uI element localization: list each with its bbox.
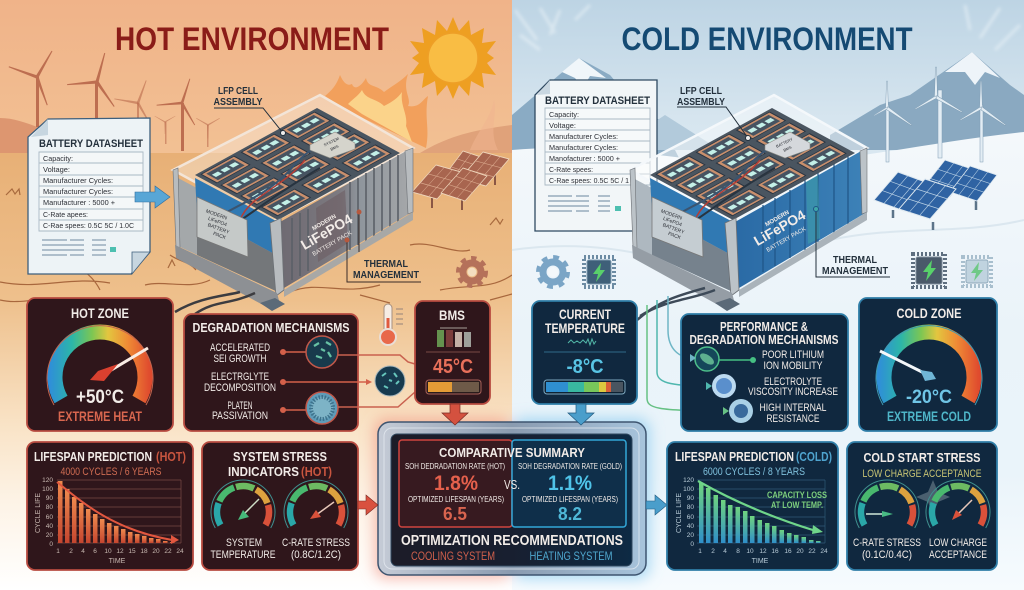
panel: hot lifespan prediction chart: CYCLE LIFE	[35, 493, 42, 533]
panel: hot zone gauge	[27, 298, 173, 431]
document: hot battery datasheet: BATTERY DATASHEET	[39, 138, 143, 150]
panel: cold start stress: ACCEPTANCE	[929, 549, 987, 561]
battery pack: cold: PACK	[667, 231, 682, 241]
battery pack: cold	[630, 95, 867, 311]
panel: hot lifespan prediction chart: 80	[46, 504, 53, 511]
panel: BMS: BMS	[439, 307, 465, 323]
panel: hot lifespan prediction chart: 90	[46, 495, 53, 502]
battery pack: hot: MODERN	[311, 214, 338, 232]
connector: decomposition arrow	[366, 379, 372, 385]
panel: cold lifespan prediction chart: 100	[683, 486, 694, 493]
document: cold battery datasheet: Manufacturer Cycles:	[549, 132, 618, 141]
panel: current temperature	[532, 301, 637, 404]
icon: cold gear	[539, 258, 567, 286]
panel: comparative summary: OPTIMIZED LIFESPAN (YEARS)	[408, 495, 504, 504]
panel: cold lifespan prediction chart: 8	[736, 548, 740, 555]
panel: comparative summary: 8.2	[558, 504, 582, 524]
panel: cold performance and degradation mechanisms: ELECTROLYTE	[764, 376, 822, 388]
panel: cold start stress: LOW CHARGE	[929, 537, 987, 549]
panel: cold start stress: C-RATE STRESS	[853, 537, 921, 549]
panel: cold zone gauge: EXTREME COLD	[887, 408, 971, 424]
panel: cold zone gauge: COLD ZONE	[896, 305, 962, 321]
panel: cold lifespan prediction chart: 60	[687, 514, 694, 521]
panel: hot system stress indicators: (0.8C/1.2C)	[291, 549, 341, 561]
panel: cold lifespan prediction chart: 6000 CYCLES / 8 YEARS	[703, 466, 805, 478]
panel: hot degradation mechanisms: ACCELERATED	[210, 342, 270, 354]
panel: hot lifespan prediction chart: 4000 CYCLES / 6 YEARS	[60, 466, 162, 478]
battery pack: cold: BATTERY	[775, 136, 794, 149]
callout: cold LFP cell assembly	[677, 86, 750, 140]
arrow: BMS to summary	[442, 404, 468, 425]
panel: hot lifespan prediction chart: 40	[46, 523, 53, 530]
glow: comparative summary	[374, 418, 650, 579]
panel: cold performance and degradation mechanisms: ION MOBILITY	[764, 360, 823, 372]
arrow: datasheet to battery	[135, 186, 170, 208]
panel: hot zone gauge: EXTREME HEAT	[58, 408, 142, 424]
panel: hot lifespan prediction chart: 60	[46, 514, 53, 521]
panel: cold start stress	[847, 442, 997, 570]
connector: passivation to BMS	[338, 392, 415, 407]
document: hot battery datasheet: C-Rae spees: 0.5C 5C / 1.0C	[43, 221, 135, 230]
optimization recommendations: OPTIMIZATION RECOMMENDATIONS	[401, 532, 623, 549]
title: cold environment: COLD ENVIRONMENT	[622, 21, 913, 57]
panel: hot lifespan prediction chart: 10	[104, 548, 112, 555]
panel: cold zone gauge	[859, 298, 997, 431]
callout: hot thermal management	[344, 210, 421, 282]
panel: cold lifespan prediction chart	[667, 442, 838, 570]
document: cold battery datasheet: C-Rae spees: 0.5C 5C / 1	[549, 176, 629, 185]
panel: hot degradation mechanisms: DECOMPOSITION	[204, 382, 276, 394]
panel: current temperature: -8°C	[566, 356, 604, 378]
battery pack: hot: BATTERY	[207, 222, 231, 236]
panel: cold lifespan prediction chart: 2	[711, 548, 715, 555]
scene: hot desert landscape	[0, 118, 512, 303]
callout: cold LFP cell assembly: LFP CELL	[680, 86, 722, 97]
panel: cold lifespan prediction chart: 16	[771, 548, 779, 555]
panel: hot lifespan prediction chart: 1	[56, 548, 60, 555]
summary heading: COMPARATIVE SUMMARY	[439, 445, 585, 460]
icon: sun	[410, 17, 496, 99]
panel: comparative summary: 6.5	[443, 504, 467, 524]
panel: hot lifespan prediction chart: 24	[176, 548, 184, 555]
battery pack: cold: BMS	[782, 144, 793, 153]
panel: hot lifespan prediction chart: 20	[152, 548, 160, 555]
panel: cold performance and degradation mechanisms: POOR LITHIUM	[762, 349, 824, 361]
battery pack: hot: BATTERY PACK	[312, 230, 353, 258]
panel: cold performance and degradation mechanisms: HIGH INTERNAL	[760, 402, 826, 414]
panel: cold lifespan prediction chart: 80	[687, 504, 694, 511]
cables: cold battery to current temperature	[637, 288, 715, 320]
panel: hot zone gauge: +50°C	[76, 387, 124, 408]
panel: cold start stress: LOW CHARGE ACCEPTANCE	[862, 468, 982, 480]
panel: hot system stress indicators: SYSTEM STRESS	[233, 449, 327, 464]
document: cold battery datasheet: Voltage:	[549, 121, 576, 130]
document: cold battery datasheet: C-Rate spees:	[549, 165, 593, 174]
battery pack: cold: BATTERY	[662, 222, 686, 236]
icon: cold wind turbines	[874, 67, 1006, 162]
icon: cold solar panels	[874, 160, 997, 230]
panel: cold zone gauge: -20°C	[906, 387, 952, 408]
document: hot battery datasheet: Manufacturer : 5000 +	[43, 198, 116, 207]
panel: cold lifespan prediction chart: 40	[687, 523, 694, 530]
panel: hot lifespan prediction chart: 22	[164, 548, 172, 555]
panel: cold lifespan prediction chart: 16	[784, 548, 792, 555]
panel: BMS	[415, 301, 490, 404]
panel: comparative summary: 1.8%	[434, 472, 478, 495]
icon: electrolyte microscope circle	[375, 366, 405, 396]
callout: cold LFP cell assembly: ASSEMBLY	[677, 97, 725, 108]
panel: cold lifespan prediction chart: 120	[683, 477, 694, 484]
battery pack: hot	[173, 95, 413, 311]
panel: hot lifespan prediction chart: 15	[128, 548, 136, 555]
callout: hot thermal management: THERMAL	[364, 259, 408, 270]
background: hot half	[0, 0, 512, 590]
panel: hot degradation mechanisms	[184, 314, 366, 431]
scene: cold mountains and snow	[512, 5, 1024, 330]
panel: cold lifespan prediction chart: TIME	[752, 558, 769, 565]
document: hot battery datasheet: Capacity:	[43, 154, 73, 163]
icon: flames behind battery	[325, 74, 498, 150]
icon: thermometer	[380, 304, 403, 345]
document: cold battery datasheet: Capacity:	[549, 110, 579, 119]
panel: hot lifespan prediction chart: 120	[42, 477, 53, 484]
battery pack: hot: PACK	[212, 231, 227, 241]
icon: hot wind turbines	[8, 50, 220, 151]
panel: cold start stress: (0.1C/0.4C)	[862, 549, 912, 561]
battery pack: hot: LiFePO4	[207, 216, 228, 228]
panel: cold lifespan prediction chart: LIFESPAN PREDICTION	[675, 449, 794, 464]
arrow: summary to cold lifespan	[646, 495, 667, 515]
panel: cold lifespan prediction chart: 1	[698, 548, 702, 555]
panel: cold lifespan prediction chart: 20	[687, 532, 694, 539]
panel: hot degradation mechanisms: ELECTRGLYTE	[211, 371, 269, 383]
panel: cold start stress: COLD START STRESS	[864, 450, 981, 465]
panel: hot system stress indicators: SYSTEM	[226, 537, 262, 549]
panel: comparative summary: COOLING SYSTEM	[411, 549, 495, 563]
panel: hot system stress indicators: INDICATORS	[228, 464, 299, 479]
panel: hot system stress indicators: TEMPERATURE	[210, 549, 276, 561]
panel: cold lifespan prediction chart: 12	[759, 548, 767, 555]
panel: cold performance and degradation mechanisms: RESISTANCE	[766, 413, 820, 425]
document: hot battery datasheet: Voltage:	[43, 165, 70, 174]
panel: comparative summary: OPTIMIZED LIFESPAN (YEARS)	[522, 495, 618, 504]
panel: cold lifespan prediction chart: 10	[746, 548, 754, 555]
panel: hot degradation mechanisms: PLATEN	[228, 400, 253, 412]
panel: comparative summary: HEATING SYSTEM	[530, 549, 613, 563]
panel: hot system stress indicators: (HOT)	[301, 464, 332, 479]
panel: cold lifespan prediction chart: 20	[796, 548, 804, 555]
title: hot environment: HOT ENVIRONMENT	[115, 21, 389, 57]
battery pack: cold: LiFePO4	[751, 206, 808, 249]
panel: cold performance and degradation mechanisms: DEGRADATION MECHANISMS	[690, 332, 839, 347]
battery pack: cold: MODERN	[764, 210, 791, 228]
panel: cold lifespan prediction chart: (COLD)	[796, 449, 832, 464]
battery pack: hot: BMS	[329, 143, 340, 152]
document: cold battery datasheet: BATTERY DATASHEET	[545, 95, 650, 107]
icon: chip dark	[913, 254, 945, 287]
icon: chip light	[963, 257, 991, 286]
document: hot battery datasheet: Manufacturer Cycles:	[43, 176, 113, 185]
panel: hot lifespan prediction chart: 6	[93, 548, 97, 555]
callout: hot LFP cell assembly	[214, 86, 286, 136]
document: hot battery datasheet: Manufacturer Cycles:	[43, 187, 113, 196]
panel: hot zone gauge: HOT ZONE	[71, 305, 129, 321]
connector: poor lithium mobility	[668, 296, 693, 358]
panel: cold performance and degradation mechanisms: VISCOSITY INCREASE	[748, 386, 838, 398]
connector: electrolyte viscosity	[657, 300, 708, 386]
panel: hot lifespan prediction chart: LIFESPAN PREDICTION	[34, 449, 152, 464]
battery pack: cold: LiFePO4	[662, 216, 683, 228]
battery pack: hot: MODERN	[205, 208, 228, 222]
panel: comparative summary: VS.	[504, 477, 520, 492]
callout: cold thermal management: THERMAL	[833, 255, 877, 266]
panel: cold lifespan prediction chart: 4	[723, 548, 727, 555]
panel: hot lifespan prediction chart: 18	[140, 548, 148, 555]
connector: SEI growth to BMS	[338, 355, 415, 364]
arrow: hot stress to summary	[358, 495, 378, 515]
panel: hot degradation mechanisms: SEI GROWTH	[214, 353, 267, 365]
panel: hot system stress indicators: C-RATE STRESS	[282, 537, 350, 549]
callout: cold thermal management: MANAGEMENT	[822, 266, 888, 277]
document: cold battery datasheet: Manufacturer Cycles:	[549, 143, 618, 152]
panel: BMS: 45°C	[433, 356, 473, 378]
panel: cold lifespan prediction chart: 24	[820, 548, 828, 555]
panel: hot degradation mechanisms: DEGRADATION MECHANISMS	[192, 320, 350, 335]
document: hot battery datasheet: C-Rate apees:	[43, 210, 88, 219]
panel: hot system stress indicators	[202, 442, 358, 570]
panel: cold lifespan prediction chart: AT LOW TEMP.	[771, 500, 823, 510]
icon: hot solar panels	[412, 151, 509, 210]
panel: cold lifespan prediction chart: CYCLE LIFE	[676, 493, 683, 533]
battery pack: hot: LiFePO4	[298, 210, 355, 253]
battery pack: cold: BATTERY PACK	[766, 226, 807, 254]
panel: hot lifespan prediction chart: 12	[116, 548, 124, 555]
panel: cold performance and degradation mechanisms	[681, 314, 848, 431]
icon: chip	[584, 257, 614, 287]
callout: hot LFP cell assembly: ASSEMBLY	[214, 97, 263, 108]
panel: hot lifespan prediction chart: 0	[49, 541, 53, 548]
panel: hot lifespan prediction chart	[27, 442, 193, 570]
panel: cold lifespan prediction chart: 0	[690, 541, 694, 548]
background: cold half	[512, 0, 1024, 590]
panel: comparative summary: 1.1%	[548, 472, 592, 495]
panel: hot lifespan prediction chart: 4	[81, 548, 85, 555]
panel: hot lifespan prediction chart: TIME	[109, 558, 126, 565]
callout: cold thermal management	[814, 206, 890, 277]
panel: cold lifespan prediction chart: CAPACITY LOSS	[767, 490, 827, 500]
panel: hot lifespan prediction chart: 2	[69, 548, 73, 555]
document: cold battery datasheet: Manofacturer : 5000 +	[549, 154, 621, 163]
panel: comparative summary	[378, 422, 646, 575]
icon: hot gear	[459, 259, 485, 285]
panel: current temperature: CURRENT	[559, 306, 611, 322]
document: cold battery datasheet	[535, 80, 657, 231]
callout: hot LFP cell assembly: LFP CELL	[218, 86, 258, 97]
panel: hot lifespan prediction chart: 20	[46, 532, 53, 539]
panel: current temperature: TEMPERATURE	[545, 320, 625, 336]
document: hot battery datasheet	[28, 118, 150, 274]
panel: hot degradation mechanisms: PASSIVATION	[212, 410, 268, 422]
panel: comparative summary: SOH DEGRADATION RATE (GOLD)	[518, 462, 622, 471]
panel: cold lifespan prediction chart: 22	[808, 548, 816, 555]
cables: hot battery to hot zone	[175, 292, 255, 314]
panel: cold performance and degradation mechanisms: PERFORMANCE &	[720, 319, 808, 334]
panel: cold lifespan prediction chart: 90	[687, 495, 694, 502]
panel: hot lifespan prediction chart: 100	[42, 486, 53, 493]
panel: comparative summary: SOH DEDRADATION RATE (HOT)	[405, 462, 505, 471]
panel: hot lifespan prediction chart: (HOT)	[156, 449, 186, 464]
connector: internal resistance	[647, 305, 726, 411]
callout: hot thermal management: MANAGEMENT	[353, 270, 419, 281]
battery pack: cold: MODERN	[660, 208, 683, 222]
arrow: current temperature to summary	[568, 404, 594, 425]
battery pack: hot: SYSTEM	[323, 136, 340, 147]
